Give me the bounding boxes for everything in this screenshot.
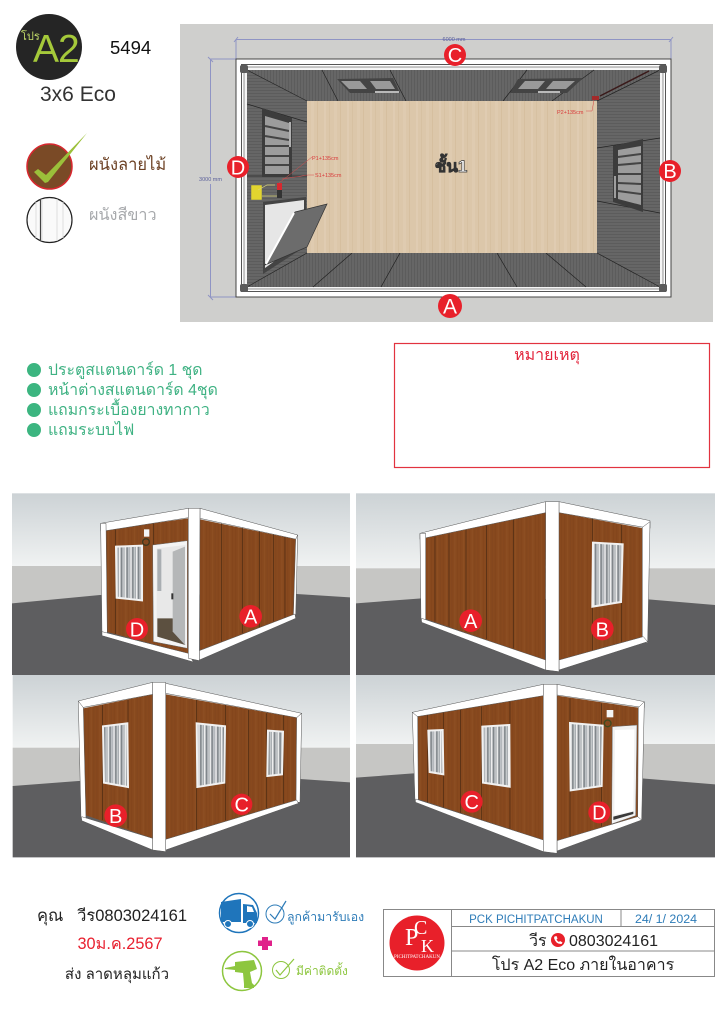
promo badge: A2: โปร	[21, 29, 40, 43]
electrical fittings	[251, 71, 649, 200]
marker D	[126, 618, 148, 641]
electrical labels: S1+135cm	[315, 173, 342, 179]
interior walls	[247, 70, 660, 287]
included items list	[27, 361, 218, 439]
marker C: C	[464, 792, 479, 814]
notes box: หมายเหตุ	[514, 347, 580, 365]
door	[263, 197, 327, 274]
customer details	[37, 907, 187, 984]
title block: วีร	[529, 932, 547, 950]
marker D: D	[592, 803, 607, 825]
promo badge: A2	[16, 14, 82, 80]
left wall window	[262, 108, 292, 177]
electrical labels: P2+135cm	[557, 110, 584, 116]
panel: 3D view A and B	[356, 493, 715, 675]
option: white wall	[27, 198, 157, 242]
included items list: แถมกระเบื้องยางทากาว	[48, 398, 210, 419]
installation label	[272, 959, 348, 978]
wall marker C: C	[448, 45, 462, 67]
marker C	[231, 794, 252, 817]
marker C	[461, 791, 483, 814]
marker A: A	[244, 607, 258, 629]
panel: floor plan	[180, 24, 713, 322]
windows	[428, 730, 443, 774]
customer pickup label: ลูกค้ามารับเอง	[287, 910, 364, 925]
title block: โปร A2 Eco ภายในอาคาร	[492, 955, 675, 974]
wall marker A: A	[443, 296, 457, 318]
logo	[390, 916, 444, 970]
wall marker B	[659, 160, 681, 183]
dimension: 6000 mm	[234, 37, 673, 59]
title block: 0803024161	[569, 933, 658, 950]
marker A	[239, 605, 262, 629]
included items list: หน้าต่างสแตนดาร์ด 4ชุด	[48, 381, 218, 400]
marker B	[104, 804, 127, 828]
customer pickup label	[266, 901, 364, 925]
floor with label	[307, 101, 597, 253]
wall marker D: D	[231, 158, 245, 180]
title block: 24/ 1/ 2024	[635, 912, 697, 926]
panel: 3D view B and C	[13, 675, 350, 857]
included items list: ประตูสแตนดาร์ด 1 ชุด	[48, 361, 203, 380]
door	[153, 541, 187, 648]
floor with label: ชั้น1	[435, 153, 467, 176]
marker B: B	[596, 619, 609, 641]
electrical labels: P1+135cm	[312, 156, 339, 162]
corner posts	[240, 65, 667, 292]
marker C: C	[234, 795, 249, 817]
icon: truck, customer pickup	[220, 894, 258, 932]
panel: 3D view C and D	[356, 675, 715, 857]
option: wood wall (selected): ผนังลายไม้	[89, 155, 166, 174]
lamp and vent	[143, 529, 149, 545]
option: wood wall (selected)	[27, 133, 166, 189]
electrical labels	[279, 100, 594, 183]
lamp and ring	[604, 710, 613, 727]
wall marker A	[438, 294, 462, 318]
wall marker B: B	[663, 161, 677, 183]
marker A: A	[464, 611, 478, 633]
title block	[384, 910, 714, 976]
logo: P	[405, 925, 418, 951]
dimension: 6000 mm: 6000 mm	[443, 37, 466, 43]
logo: C	[414, 917, 427, 939]
installation label: มีค่าติดตั้ง	[296, 962, 348, 978]
customer details: 30ม.ค.2567	[78, 935, 162, 953]
option: white wall: ผนังสีขาว	[89, 206, 157, 224]
door	[612, 725, 637, 824]
logo: PICHITPATCHAKUN	[394, 955, 440, 960]
code number: 5494	[110, 37, 151, 58]
window	[592, 543, 623, 607]
marker A	[459, 609, 482, 633]
logo: K	[421, 936, 434, 956]
dimension: 3000 mm: 3000 mm	[199, 177, 222, 183]
marker B	[591, 618, 614, 641]
plus icon	[258, 937, 272, 950]
container outer frame	[236, 59, 671, 297]
panel: 3D view D and A	[12, 493, 350, 675]
marker B: B	[109, 806, 122, 828]
promo badge: A2: A2	[33, 28, 79, 71]
top wall windows	[337, 78, 583, 93]
notes box	[394, 344, 710, 468]
title block: PCK PICHITPATCHAKUN	[469, 914, 603, 926]
included items list: แถมระบบไฟ	[48, 420, 134, 439]
marker D	[588, 801, 610, 825]
wall marker C	[444, 44, 466, 67]
right wall window	[613, 139, 643, 212]
customer details: คุณ วีร0803024161	[37, 907, 187, 926]
icon: drill, installation	[222, 952, 262, 990]
marker D: D	[130, 619, 144, 641]
window	[116, 546, 142, 600]
dimension: 3000 mm	[199, 57, 236, 300]
wall marker D	[227, 156, 249, 180]
icon: phone	[551, 933, 565, 947]
customer details: ส่ง ลาดหลุมแก้ว	[65, 966, 169, 984]
windows	[103, 723, 128, 787]
model name: 3x6 Eco	[40, 83, 116, 106]
